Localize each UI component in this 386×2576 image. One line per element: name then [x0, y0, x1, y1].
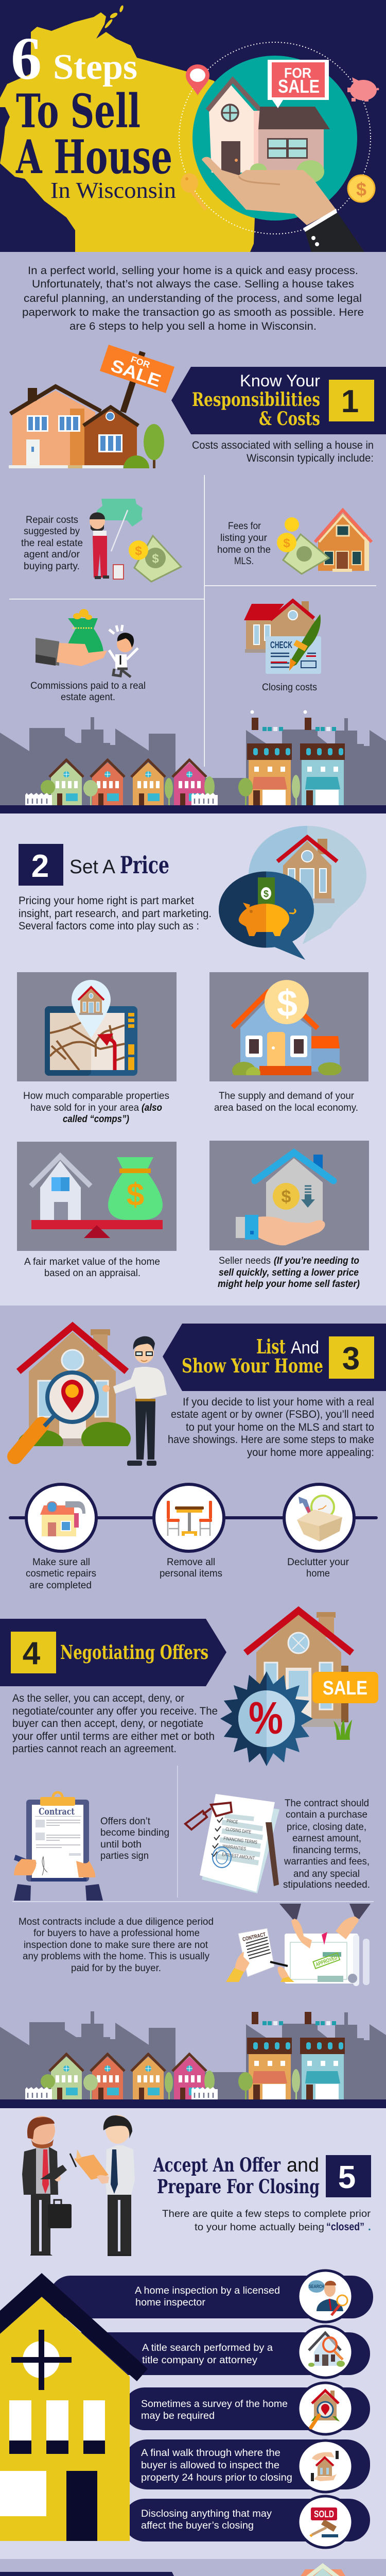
- card: seller needs: [209, 1141, 369, 1250]
- text: closing intro: There are quite a few steps to complete prior: [162, 2209, 371, 2219]
- captions: appraisal and seller needs: [24, 1256, 360, 1290]
- pill: final walk through: A final walk through where the: [141, 2448, 280, 2459]
- banner: step 3 heading: 3: [342, 1341, 360, 1377]
- cell: contract contents: [185, 1794, 370, 1893]
- captions: comps and supply: called “comps”): [63, 1114, 129, 1125]
- text block: Offers don’t: [100, 1816, 151, 1827]
- banner: step 4 heading: [0, 1619, 226, 1686]
- captions: preparation steps: are completed: [29, 1580, 92, 1591]
- icon: contract clipboard: [14, 1792, 103, 1901]
- text block: home on the: [217, 545, 271, 555]
- pill: survey: [124, 2383, 370, 2434]
- closing checklist pills: [49, 2270, 373, 2548]
- banner: step 1 heading: [171, 367, 386, 434]
- title: In Wisconsin: [50, 178, 176, 203]
- captions: comps and supply: [23, 1091, 358, 1125]
- cell: binding offers: [14, 1792, 169, 1901]
- icon: checklist with glasses and pen: EARNEST AMOUNT: [222, 1852, 255, 1861]
- captions: appraisal and seller needs: might help your home sell faster): [218, 1279, 360, 1290]
- captions: appraisal and seller needs: (If you’re needing to: [274, 1256, 359, 1266]
- text: pricing intro: Pricing your home right is part market: [19, 895, 194, 907]
- pill: disclosing: Disclosing anything that may: [141, 2509, 272, 2519]
- captions: preparation steps: [26, 1557, 349, 1591]
- step 2 heading: Set A: [69, 856, 116, 878]
- captions: preparation steps: personal items: [160, 1568, 222, 1579]
- icon: money bag in hand and happy agent: [36, 609, 138, 677]
- pill: disclosing: [124, 2496, 370, 2548]
- text: negotiating intro: As the seller, you can accept, deny, or: [12, 1692, 184, 1704]
- text block: contain a purchase: [286, 1809, 367, 1820]
- step 5 heading: [153, 2154, 371, 2198]
- captions: comps and supply: (also: [142, 1103, 162, 1113]
- icon: painter with money: $: [152, 552, 159, 566]
- captions: comps and supply: area based on the local economy.: [214, 1103, 358, 1113]
- icon: checklist with glasses and pen: WARRANTIES: [222, 1843, 247, 1852]
- icon: hand holding house with price drop: $: [282, 1187, 291, 1207]
- pill: home inspection: SEARCH: [309, 2284, 324, 2289]
- icon: house and check: CHECK: [270, 640, 292, 650]
- illustration: townscape one: [0, 710, 386, 805]
- text block: [100, 1816, 169, 1861]
- house in hand: [207, 80, 330, 183]
- banner: step 6 heading: [0, 2572, 189, 2576]
- text: due diligence: any problems with the home. This is usually: [23, 1951, 209, 1962]
- captions: preparation steps: Declutter your: [287, 1557, 349, 1568]
- step 2 heading: Price: [120, 851, 169, 879]
- icon: table and chairs: [154, 1484, 224, 1551]
- pill: final walk through: buyer is allowed to inspect the: [141, 2460, 279, 2471]
- panel: step 1 house with sale sign: SALE: [108, 356, 163, 391]
- icon: speech bubbles with house and piggy bank: $: [264, 889, 269, 899]
- text: negotiating intro: [12, 1692, 218, 1755]
- text: due diligence: paid for by the buyer.: [71, 1963, 161, 1974]
- icon: painter with money: [90, 499, 181, 582]
- hero panel: [0, 5, 379, 252]
- text: closing intro: [162, 2209, 371, 2233]
- icon: house balanced against money bag: [31, 1156, 163, 1238]
- text: costs intro: [192, 439, 374, 464]
- icon: declutter box: [284, 1484, 354, 1551]
- captions: preparation steps: cosmetic repairs: [26, 1568, 96, 1579]
- intro text: Unfortunately, that’s not always the case. Selling a house takes: [32, 278, 354, 290]
- pill: disclosing: affect the buyer’s closing: [141, 2520, 254, 2531]
- banner: step 4 heading: Negotiating Offers: [60, 1641, 208, 1664]
- text: pricing intro: insight, part research, and part marketing.: [19, 908, 212, 920]
- icon: house and check: [244, 601, 321, 674]
- captions: appraisal and seller needs: sell quickly, setting a lower price: [219, 1267, 359, 1278]
- title: To Sell: [16, 84, 141, 139]
- icon: hand holding house with price drop: [236, 1153, 334, 1245]
- panel: step 1 house with sale sign: [9, 345, 174, 468]
- illustration: house with percent badge and sale sign: [220, 1611, 378, 1766]
- text block: financing terms,: [293, 1845, 361, 1856]
- text block: stipulations needed.: [283, 1879, 370, 1890]
- text block: estate agent.: [61, 692, 115, 703]
- text: due diligence: inspection done to make sure there are not: [24, 1940, 208, 1951]
- icon: speech bubbles with house and piggy bank: [219, 826, 366, 960]
- panel: step 1 house with sale sign: FOR: [130, 354, 151, 370]
- pill: home inspection: [49, 2270, 373, 2322]
- illustration: agent and couple before house: [205, 2566, 379, 2576]
- text block: Repair costs: [26, 515, 78, 526]
- banner: step 4 heading: 4: [23, 1636, 41, 1671]
- pill: survey: may be required: [141, 2411, 215, 2421]
- text: listing intro: to put your home on the MLS and start to: [186, 1421, 374, 1433]
- pill: title search: title company or attorney: [142, 2355, 258, 2366]
- card: comparable properties: [17, 972, 177, 1081]
- text block: Closing costs: [262, 682, 317, 693]
- icon: checklist with glasses and pen: [185, 1794, 279, 1893]
- icon: percent badge: [220, 1671, 313, 1766]
- pill: disclosing: SOLD: [314, 2509, 334, 2519]
- text: listing intro: [168, 1396, 374, 1459]
- illustration: step 3 house and agent: [13, 1326, 167, 1466]
- agent figure: [102, 1336, 167, 1466]
- card: supply and demand: [209, 972, 369, 1081]
- icon: location pin: [186, 64, 209, 95]
- step 5 heading: Accept An Offer: [153, 2154, 280, 2176]
- banner: step 3 heading: And: [291, 1338, 319, 1358]
- text block: [30, 681, 146, 703]
- icon: house with dollar coin: $: [277, 983, 297, 1024]
- text block: warranties and fees,: [284, 1856, 370, 1867]
- captions: appraisal and seller needs: based on an appraisal.: [44, 1268, 141, 1279]
- intro text: In a perfect world, selling your home is a quick and easy process.: [28, 265, 358, 277]
- illustration: contract signing over blueprint: APPROVED: [315, 1955, 338, 1968]
- cell: commissions: [30, 609, 146, 703]
- banner: step 1 heading: Know Your: [240, 371, 320, 390]
- cell: closing costs: [244, 601, 321, 693]
- icon: house with money: [277, 510, 372, 574]
- illustration: contract signing over blueprint: [226, 1904, 371, 1986]
- intro text: paperwork to make the transaction go as smooth as possible. Here: [22, 307, 364, 318]
- text: closing intro: “closed”: [326, 2221, 364, 2233]
- icon: checklist with glasses and pen: CLOSING DATE: [225, 1826, 252, 1835]
- text block: Commissions paid to a real: [30, 681, 146, 691]
- captions: preparation steps: Make sure all: [32, 1557, 90, 1568]
- title: A House: [15, 130, 172, 184]
- title: 6: [11, 25, 42, 92]
- icon: percent badge: %: [249, 1692, 283, 1743]
- text block: the real estate: [21, 538, 83, 549]
- pill: final walk through: property 24 hours prior to closing: [141, 2472, 292, 2483]
- pill: survey: Sometimes a survey of the home: [141, 2399, 288, 2410]
- icon: painter with money: $: [135, 544, 142, 558]
- captions: appraisal and seller needs: A fair market value of the home: [24, 1257, 160, 1267]
- text: costs intro: Costs associated with selling a house in: [192, 439, 374, 451]
- text block: listing your: [220, 533, 268, 544]
- icon: checklist with glasses and pen: PRICE: [226, 1818, 238, 1825]
- intro text: [22, 265, 364, 332]
- text block: until both: [100, 1839, 142, 1850]
- pill: home inspection: home inspector: [135, 2297, 206, 2308]
- text: listing intro: estate agent or by owner (FSBO), you’ll need: [171, 1409, 374, 1420]
- text block: parties sign: [100, 1851, 149, 1861]
- for sale sign: SALE: [278, 76, 320, 97]
- timeline: three home preparation steps: [10, 1484, 376, 1551]
- pill: title search: [51, 2326, 370, 2378]
- step 2 heading: 2: [31, 849, 49, 884]
- banner: step 1 heading: & Costs: [259, 408, 320, 430]
- text block: [283, 1798, 370, 1890]
- text block: The contract should: [285, 1798, 369, 1809]
- banner: step 3 heading: Show Your Home: [182, 1354, 323, 1377]
- icon: checklist with glasses and pen: FINANCING TERMS: [223, 1836, 257, 1845]
- icon: repairs: [26, 1484, 96, 1551]
- text block: earnest amount,: [292, 1833, 361, 1844]
- illustration: two businessmen: [22, 2115, 135, 2256]
- text: due diligence: [19, 1917, 214, 1974]
- illustration: contract signing over blueprint: CONTRACT: [242, 1931, 267, 1943]
- hand holding house: [202, 157, 364, 252]
- icon: house with money: $: [283, 536, 290, 550]
- intro text: careful planning, an understanding of the process, and some legal: [24, 293, 362, 304]
- text: costs intro: Wisconsin typically include:: [247, 452, 374, 464]
- icon: contract clipboard: Contract: [39, 1806, 75, 1817]
- pill: home inspection: A home inspection by a licensed: [135, 2285, 280, 2296]
- captions: comps and supply: have sold for in your area: [30, 1103, 139, 1113]
- text block: buying party.: [24, 561, 80, 572]
- text block: [21, 515, 83, 572]
- banner: step 1 heading: Responsibilities: [192, 389, 320, 411]
- text: listing intro: have showings. Here are some steps to make: [168, 1434, 374, 1446]
- text: pricing intro: [19, 895, 212, 932]
- banner: step 3 heading: [163, 1324, 386, 1391]
- title: Steps: [53, 47, 137, 87]
- text: closing intro: .: [368, 2221, 371, 2233]
- icon: piggy bank: [347, 77, 379, 101]
- icon: house with dollar coin: [229, 980, 342, 1081]
- icon: key: [181, 173, 206, 210]
- cell: MLS fees: [217, 510, 372, 574]
- card: fair market value: [17, 1142, 177, 1251]
- captions: appraisal and seller needs: Seller needs: [219, 1256, 271, 1266]
- icon: coin: $: [356, 179, 366, 200]
- icon: map tablet with pin: [45, 980, 137, 1076]
- for sale sign: [268, 60, 329, 108]
- map of Wisconsin: [0, 5, 257, 252]
- illustration: house with percent badge and sale sign: SALE: [323, 1677, 367, 1699]
- text block: agent and/or: [24, 549, 80, 560]
- text: negotiating intro: buyer can then accept, deny, or negotiate: [12, 1718, 203, 1730]
- text block: [217, 521, 271, 567]
- text: negotiating intro: parties cannot reach an agreement.: [12, 1743, 177, 1755]
- text block: MLS.: [234, 556, 254, 567]
- cell: repair costs: [21, 499, 181, 582]
- pill: title search: A title search performed by a: [142, 2343, 273, 2353]
- icon: house balanced against money bag: $: [127, 1177, 144, 1213]
- text: due diligence: for buyers to have a professional home: [33, 1928, 200, 1939]
- for sale sign: FOR: [284, 65, 311, 81]
- text block: price, closing date,: [287, 1822, 366, 1833]
- captions: preparation steps: home: [306, 1568, 330, 1579]
- text: negotiating intro: your offer until terms are either met or both: [12, 1731, 215, 1742]
- step 5 heading: and: [287, 2155, 319, 2176]
- text: listing intro: If you decide to list your home with a real: [183, 1396, 374, 1408]
- dotted circle and teal disc: [179, 42, 371, 234]
- captions: preparation steps: Remove all: [167, 1557, 215, 1568]
- captions: comps and supply: How much comparable properties: [23, 1091, 169, 1101]
- captions: comps and supply: The supply and demand of your: [219, 1091, 355, 1101]
- text: pricing intro: Several factors come into play such as :: [19, 920, 199, 932]
- pill: final walk through: [124, 2439, 370, 2492]
- text: due diligence: Most contracts include a due diligence period: [19, 1917, 214, 1927]
- step 5 heading: Prepare For Closing: [157, 2175, 320, 2198]
- title: [11, 25, 176, 203]
- step 2 heading: [19, 844, 169, 886]
- banner: step 1 heading: 1: [341, 384, 359, 419]
- intro text: are 6 steps to help you sell a home in Wisconsin.: [69, 320, 317, 332]
- text block: become binding: [100, 1827, 169, 1838]
- step 5 heading: 5: [338, 2160, 356, 2195]
- text: listing intro: your home more appealing:: [247, 1447, 374, 1459]
- illustration: big yellow house: [0, 2273, 148, 2541]
- text block: and any special: [293, 1869, 360, 1879]
- text: closing intro: to your home actually being: [195, 2222, 324, 2233]
- text block: Fees for: [228, 521, 261, 532]
- illustration: townscape two: [0, 2011, 386, 2099]
- text block: suggested by: [24, 526, 80, 537]
- icon: coin: [348, 175, 375, 202]
- banner: step 3 heading: List: [256, 1335, 286, 1358]
- text: negotiating intro: negotiate/counter any offer you receive. The: [12, 1705, 218, 1717]
